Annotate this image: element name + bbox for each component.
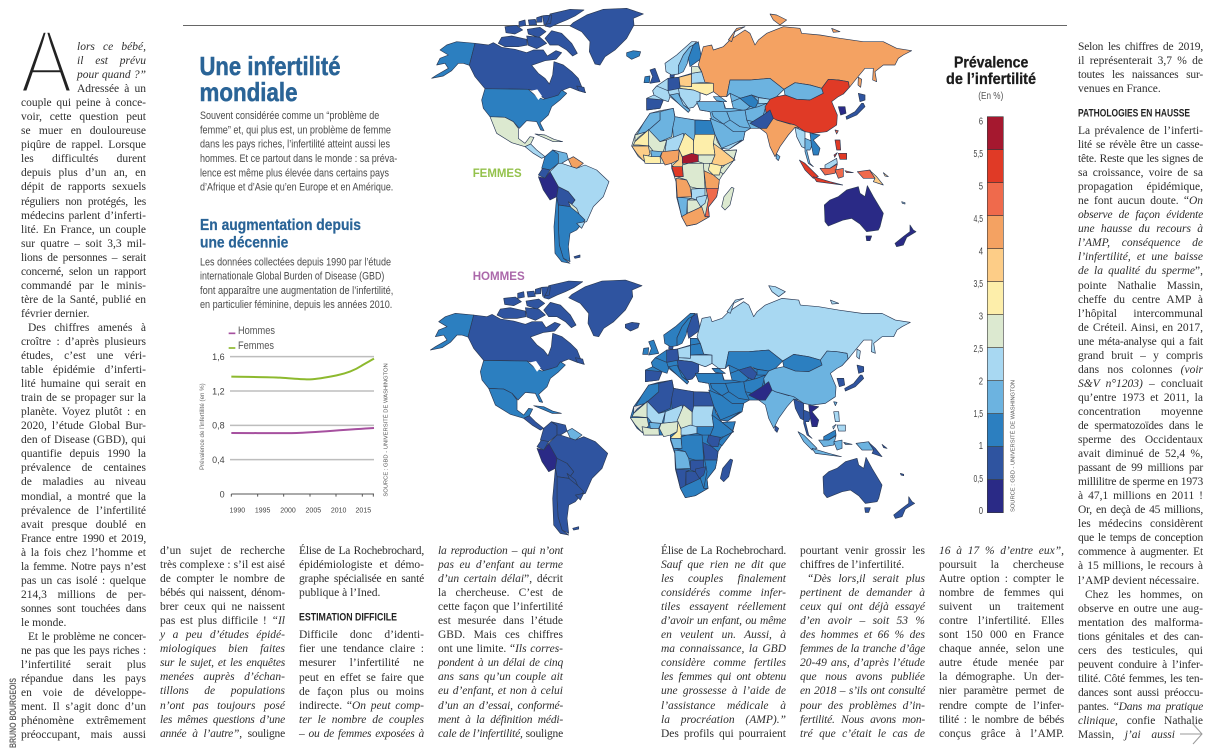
text column 1: médecins parlent d’inferti- [21, 210, 146, 222]
text column 2: très complexe : s’il est aisé [160, 559, 285, 571]
label: femmes: FEMMES [473, 166, 522, 180]
region: Oceania [824, 170, 916, 247]
colour scale labels: 0 [979, 506, 983, 517]
text column 2: sur le sujet, et les enquêtes [160, 657, 285, 669]
text: cheffe du centre AMP à [1078, 294, 1203, 306]
text: passant de 99 millions par [1078, 462, 1203, 474]
text: tions génitales et des can- [1078, 631, 1203, 643]
curve: hommes [231, 428, 374, 433]
chart y axis labels: 0,8 [212, 421, 225, 431]
text: pantes. “Dans ma pratique [1078, 701, 1203, 713]
text column 1: Des chiffres amenés à [28, 322, 146, 334]
text column 7: tilité : le nombre de bébés [939, 714, 1064, 726]
text column 7: chaque année, selon une [939, 643, 1064, 655]
text column 4 [437, 545, 564, 740]
colour scale labels: 1 [979, 441, 983, 452]
text column 1: lité humaine qui serait en [21, 378, 146, 390]
text: l’AMP, conséquence de [1078, 237, 1203, 249]
text column 7: nier paramètre permet de [939, 685, 1064, 697]
legend title: (En %) [978, 91, 1003, 102]
chart legend: Hommes [238, 325, 275, 337]
text: de spermatozoïdes dans le [1078, 420, 1203, 432]
text: observe en outre une aug- [1078, 603, 1203, 615]
text column 1: table épidémie d’inferti- [21, 364, 146, 376]
text column 1: pour quand ?” [77, 69, 146, 81]
text: une méta-analyse qui a fait [1078, 336, 1203, 348]
text: mesurer l’infertilité ne [299, 657, 424, 669]
text column 5: ma connaissance, la GBD [661, 643, 786, 655]
colour scale labels: 3 [979, 312, 983, 322]
text: indirecte. “On peut comp- [299, 700, 424, 712]
chart legend [229, 325, 275, 352]
text column 1: février dernier. [21, 308, 89, 320]
text: propagation épidémique, [1078, 181, 1203, 193]
colour scale labels: 2,5 [974, 344, 983, 355]
text column 1: Adressée à un [77, 83, 146, 95]
text column 2: miologiques bien faites [160, 643, 285, 655]
text: de façon plus ou moins [299, 686, 424, 698]
chart y axis labels: 0,4 [212, 455, 225, 465]
map: femmes [432, 8, 916, 263]
text column 2: d’un sujet de recherche [160, 545, 285, 557]
text: Massin, j’ai aussi [1078, 729, 1175, 741]
region: North America [430, 280, 642, 430]
colour scale labels: 5 [979, 182, 983, 192]
legend source: SOURCE : GBD - UNIVERSITÉ DE WASHINGTON [1010, 380, 1016, 512]
text column 4: GBD. Mais ces chiffres [438, 629, 563, 641]
legend title: Prévalence [954, 54, 1029, 71]
text: tilité. Côté femmes, les ten- [1078, 673, 1203, 685]
text column 7: conçus grâce à l’AMP. [939, 728, 1064, 740]
text column 3: Élise de La Rochebrochard, [299, 545, 424, 557]
text column 7: contre l’infertilité. Elles [939, 615, 1064, 627]
text column 1: Et le problème ne concer- [28, 631, 146, 643]
text column 5: les femmes qui ont obtenu [661, 671, 786, 683]
text: les médecins considèrent [1078, 518, 1203, 530]
chart y axis labels: 1,2 [212, 386, 225, 396]
colour scale labels: 4,5 [974, 214, 983, 225]
chart y axis labels: 1,6 [212, 352, 225, 362]
chart x axis labels: 1990 [230, 508, 245, 515]
text column 6: chiffres de l’infertilité. [800, 559, 904, 571]
text column 2: y a peu d’études épidé- [160, 629, 285, 641]
text column 6 [799, 545, 926, 740]
text column 4: d’un certain délai”, décrit [438, 573, 563, 585]
text column 5: Sauf que rien ne dit que [661, 559, 786, 571]
title [200, 51, 340, 107]
text column 1: sur quatre – soit 3,3 mil- [21, 238, 146, 250]
text column 6: d’en avoir – soit 53 % [800, 615, 925, 627]
text column 5: considère comme fertiles [661, 657, 786, 669]
text column 7: rendre compte de l’infer- [939, 700, 1064, 712]
text column 4: la chercheuse. C’est de [438, 587, 563, 599]
text: clinique, confie Nathalie [1078, 715, 1203, 727]
horizontal rule [183, 25, 1067, 26]
text column 4: cette façon que l’infertilité [438, 601, 563, 613]
text column 1: réguliers non protégés, les [21, 196, 146, 208]
intro text: lence est même plus élevée dans certains pays [200, 167, 389, 179]
text column 7: poursuit la chercheuse [939, 559, 1064, 571]
chart source: SOURCE : GBD - UNIVERSITÉ DE WASHINGTON [382, 363, 389, 497]
text column 1: le monde. [21, 617, 66, 629]
drop cap: A [20, 11, 73, 112]
text: pointe Nathalie Massin, [1078, 280, 1203, 292]
text: millilitre de sperme en 1973 [1078, 476, 1203, 488]
colour scale labels: 3,5 [974, 279, 983, 290]
text column 7: sont 150 000 en France [939, 629, 1064, 641]
legend title: de l’infertilité [946, 71, 1036, 88]
text column 1: l’infertilité serait plus [21, 659, 146, 671]
text: grand bruit – y compris [1078, 350, 1203, 362]
chart y axis labels: 0 [220, 489, 225, 499]
text: de Créteil. Ainsi, en 2017, [1078, 322, 1203, 334]
colour scale labels: 4 [979, 246, 983, 258]
text column 3: graphe spécialisée en santé [299, 573, 424, 585]
subheading: une décennie [200, 235, 288, 252]
text column 6: pourtant venir grossir les [800, 545, 925, 557]
decade text: en particulier féminine, depuis les années 2010. [200, 299, 392, 311]
text: S&V n°1203) – concluait [1078, 378, 1203, 390]
text column 6: “Dès lors,il serait plus [807, 573, 925, 585]
text: – ou de femmes exposées à [299, 728, 424, 740]
text: dans nos colonnes (voir [1078, 364, 1203, 376]
text column 7: la démographe. Un der- [939, 671, 1064, 683]
text column 1: pas un cas isolé : quelque [21, 575, 146, 587]
text: avait diminué de 52,4 %, [1078, 448, 1203, 460]
text column 4: pas eu d’enfant au terme [438, 559, 563, 571]
region: Asia [695, 286, 910, 457]
text: une hausse du recours à [1078, 223, 1203, 235]
text column 2: menées auprès d’échan- [160, 671, 285, 683]
text: l’AMP devient nécessaire. [1078, 574, 1199, 586]
text: ter le nombre de couples [299, 714, 424, 726]
text: de la qualité du sperme”, [1078, 265, 1203, 277]
decade text [200, 256, 393, 311]
chart x axis labels: 2015 [356, 508, 371, 515]
chart x axis labels: 1995 [255, 508, 271, 515]
text column 1: planète. Voyez plutôt : en [21, 406, 146, 418]
text column 8 [1078, 41, 1204, 741]
text column 7: Autre option : compter le [939, 573, 1064, 585]
text column 1: lité. En France, un couple [21, 224, 146, 236]
photo credit: BRUNO BOURGEOIS [8, 678, 18, 748]
text column 5: Élise de La Rochebrochard. [661, 545, 786, 557]
text column 8: venues en France. [1078, 83, 1161, 95]
text column 5: tiles essayent réellement [661, 601, 786, 613]
text column 8: toutes les naissances sur- [1078, 69, 1203, 81]
intro text: dans les pays riches, l’infertilité atteint aussi les [200, 139, 390, 151]
region: Europe [643, 313, 725, 384]
text column 1: den of Disease (GBD), qui [21, 434, 146, 446]
text column 4: cale de l’infertilité, souligne [438, 728, 563, 740]
colour scale labels: 0,5 [974, 474, 983, 485]
text column 5: la procréation (AMP).” [661, 714, 786, 726]
text column 2 [159, 545, 286, 740]
text column 2: n’ont pas toujours posé [160, 700, 285, 712]
colour scale labels: 6 [979, 116, 983, 128]
text: peuvent conduire à l’infer- [1078, 659, 1203, 671]
intro text: d’Afrique et d’Asie qu’en Europe et en Amérique. [200, 182, 393, 194]
map: hommes [430, 280, 915, 535]
text: peut en effet se faire que [299, 672, 424, 684]
text column 7: nombre de femmes qui [939, 587, 1064, 599]
region: Asia [697, 14, 912, 185]
text: sa croissance, voire de sa [1078, 167, 1203, 179]
text column 4: ont une limite. “Ils corres- [438, 643, 563, 655]
text column 1: depuis plus d’un an, en [21, 167, 146, 179]
text column 4: ment à la définition médi- [438, 714, 563, 726]
text column 3 [298, 544, 424, 740]
text column 6: ceux qui ont déjà essayé [800, 601, 925, 613]
text: observe de façon évidente [1078, 209, 1203, 221]
text column 6: femmes de la tranche d’âge [800, 643, 925, 655]
colour scale labels: 1,5 [974, 409, 983, 420]
text column 7: autre étude menée par [939, 657, 1064, 669]
text column 1 [21, 41, 146, 741]
text column 1: se muer en douloureuse [21, 125, 146, 137]
chart x axis labels: 2010 [331, 508, 347, 515]
text column 5: les couples finalement [661, 573, 786, 585]
text column 2: de compter le nombre de [160, 573, 285, 585]
text column 5: considérés comme infer- [661, 587, 786, 599]
text column 6: 20-49 ans, d’après l’étude [800, 657, 925, 669]
text column 1: commandé par le minis- [21, 280, 146, 292]
text: Chez les hommes, on [1085, 589, 1203, 601]
text: La prévalence de l’inferti- [1078, 125, 1203, 137]
text: mentation des malforma- [1078, 617, 1203, 629]
text column 4: eu d’enfant, et non à celui [438, 685, 563, 697]
colour scale labels [974, 116, 983, 517]
text column 1: concerné, selon un rapport [21, 266, 146, 278]
text column 6: tré que c’était le cas de [800, 728, 925, 740]
text column 1: prévalence de centaines [21, 462, 146, 474]
text column 1: 214,3 millions de per- [21, 589, 146, 601]
region: Africa [632, 108, 737, 226]
text column 4: est mesurée dans l’étude [438, 615, 563, 627]
text column 1: France entre 1990 et 2019, [21, 533, 146, 545]
text column 8: Selon les chiffres de 2019, [1078, 41, 1203, 53]
text column 1: la femme. Notre pays n’est [21, 561, 146, 573]
text column 1: les difficultés durent [21, 153, 146, 165]
text: cers des testicules, qui [1078, 645, 1203, 657]
text column 6: des hommes et 66 % des [800, 629, 925, 641]
text column 1: de maladies au niveau [21, 476, 146, 488]
text column 1: dépit de rapports sexuels [21, 181, 146, 193]
chart legend: Femmes [238, 340, 274, 352]
text: concentration moyenne [1078, 406, 1203, 418]
curve: femmes [231, 359, 374, 379]
intro text: hommes. Et ce partout dans le monde : sa préva- [200, 153, 398, 165]
text column 1: 2020, l’étude Global Bur- [21, 420, 146, 432]
decade text: font apparaître une augmentation de l’infertilité, [200, 285, 393, 297]
text column 7: 16 à 17 % d’entre eux”, [939, 545, 1064, 557]
text: à 47,1 millions en 2011 ! [1078, 490, 1203, 502]
line chart [200, 325, 389, 515]
intro text: femme” et, qui plus est, un problème de femme [200, 124, 391, 136]
chart y axis title: Prévalence de l’infertilité (en %) [200, 383, 206, 470]
text column 1: en voie de développe- [21, 687, 146, 699]
chart y axis labels [212, 352, 225, 499]
text column 6: pour des problèmes d’in- [800, 700, 925, 712]
text column 5: une grossesse à l’aide de [661, 685, 786, 697]
label: hommes: HOMMES [473, 269, 525, 283]
text: commence à augmenter. Et [1078, 546, 1203, 558]
text column 5: en veulent un. Aussi, à [661, 629, 786, 641]
text column 2: année à l’autre”, souligne [160, 728, 285, 740]
text column 4: la reproduction – qui n’ont [438, 545, 563, 557]
region: North America [432, 8, 643, 158]
text column 1: sonnes sont touchées dans [21, 603, 146, 615]
colour scale labels: 2 [979, 376, 983, 388]
text: qu’entre 1973 et 2011, la [1078, 392, 1203, 404]
text column 1: croître : d’après plusieurs [21, 336, 146, 348]
region: Europe [644, 42, 727, 112]
subheading [200, 217, 361, 252]
text column 4: ans sans qu’un couple ait [438, 671, 563, 683]
arrow: next page [1180, 724, 1202, 744]
region: South America [538, 150, 609, 263]
text column 7 [939, 545, 1064, 740]
text column 3: publique à l’Ined. [299, 587, 380, 599]
text column 1: phénomène extrêmement [21, 715, 146, 727]
colour scale labels: 5,5 [974, 149, 983, 160]
text column 2: brer ceux qui ne naissent [160, 601, 285, 613]
text: ne font aucun doute. “On [1078, 195, 1203, 207]
text: que le temps de conception [1078, 532, 1203, 544]
text column 6: en 2018 – s’ils ont consulté [800, 685, 925, 697]
text column 1: à la fois chez l’homme et [21, 547, 146, 559]
text column 1: mondial, a montré que la [21, 490, 146, 502]
text column 5 [661, 544, 786, 740]
text: Difficile donc d’identi- [299, 629, 424, 641]
intro text: Souvent considérée comme un “problème de [200, 110, 379, 122]
text: sperme des Occidentaux [1078, 434, 1203, 446]
heading: estimation difficile: ESTIMATION DIFFICILE [299, 612, 397, 624]
text column 3: épidémiologiste et démo- [299, 559, 424, 571]
text column 2: bébés qui naissent, dénom- [160, 587, 285, 599]
text: dances sont aussi préoccu- [1078, 687, 1203, 699]
text: lité se révèle être un casse- [1078, 139, 1203, 151]
text column 1: ment. Il s’agit donc d’un [21, 701, 146, 713]
chart x axis labels: 2005 [306, 508, 321, 515]
text column 5: Des profils qui pourraient [661, 728, 786, 740]
text column 2: les mêmes questions d’une [160, 714, 285, 726]
text column 7: suivent un traitement [939, 601, 1064, 613]
text column 1: lors ce bébé, [77, 41, 146, 53]
text column 1: il est prévu [77, 55, 146, 67]
text: Or, en deçà de 45 millions, [1078, 504, 1203, 516]
text: l’hôpital intercommunal [1078, 308, 1203, 320]
text column 1: quantifie depuis 1990 la [21, 448, 146, 460]
region: Oceania [823, 442, 915, 518]
region: South America [537, 422, 608, 535]
text column 6: que nous avons publiée [800, 671, 925, 683]
text column 5: l’assistance médicale à [661, 700, 786, 712]
decade text: internationale Global Burden of Disease (GBD) [200, 271, 385, 283]
text column 1: voir, cette question peut [21, 111, 146, 123]
text column 1: piqûre de rappel. Lorsque [21, 139, 146, 151]
text column 1: répandue dans les pays [21, 673, 146, 685]
text column 4: pondent à un délai de cinq [438, 657, 563, 669]
title: Une infertilité [200, 51, 340, 81]
text: à 15 millions, le recours à [1078, 560, 1203, 572]
chart x axis labels: 2000 [280, 508, 296, 515]
chart x axis labels [230, 508, 371, 515]
region: Africa [630, 380, 735, 498]
text column 5: d’avoir un enfant, ou même [661, 615, 786, 627]
text column 1: tère de la Santé, publié en [21, 294, 146, 306]
title: mondiale [200, 77, 298, 107]
text column 1: ne pas que les pays riches : [21, 645, 146, 657]
text column 6: pertinent de demander à [800, 587, 925, 599]
text: l’infertilité, et une baisse [1078, 251, 1203, 263]
subheading: En augmentation depuis [200, 217, 361, 234]
text column 2: pas est plus difficile ! “Il [160, 615, 285, 627]
text column 2: tillons de populations [160, 685, 285, 697]
text column 1: train de se propager sur la [21, 392, 146, 404]
text column 8: il représenterait 3,7 % de [1078, 55, 1203, 67]
text column 1: préoccupant, mais aussi [21, 729, 146, 741]
decade text: Les données collectées depuis 1990 par l’étude [200, 256, 391, 268]
text column 1: études, c’est une véri- [21, 350, 146, 362]
text: fier une tendance claire : [299, 643, 424, 655]
text column 1: lions de personnes – serait [21, 252, 146, 264]
text column 1: avait presque doublé en [21, 519, 146, 531]
text column 1: prévalence de l’infertilité [21, 505, 146, 517]
text column 4: d’un an d’essai, conformé- [438, 700, 563, 712]
text column 1: couple qui peine à conce- [21, 97, 146, 109]
text column 6: fertilité. Nous avons mon- [800, 714, 925, 726]
text: tête. Reste que les signes de [1078, 153, 1203, 165]
legend title [946, 54, 1036, 102]
intro text [200, 110, 398, 194]
colour scale [987, 117, 1003, 513]
